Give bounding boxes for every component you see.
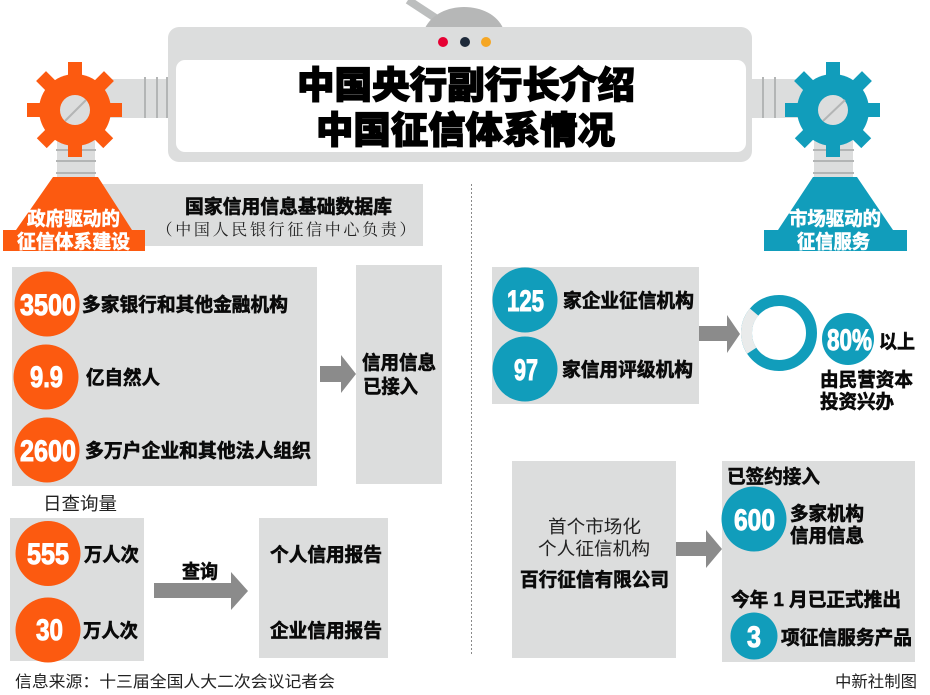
stat: 3500: 多家银行和其他金融机构 — [82, 293, 288, 316]
stat: 80 percent: 80% — [827, 324, 872, 357]
panel: Baihang credit: 百行征信有限公司 — [520, 569, 669, 591]
panel: national credit database — [100, 184, 423, 246]
donut chart: 80 percent — [746, 300, 812, 366]
stat: 555: 万人次 — [84, 544, 139, 566]
stat: 555: 555 — [27, 538, 69, 571]
stat: 30: 万人次 — [83, 620, 138, 642]
stat: 3500 — [14, 272, 288, 336]
stat: 2600: 多万户企业和其他法人组织 — [85, 439, 311, 462]
title panel — [168, 27, 752, 162]
stat: 97: 家信用评级机构 — [562, 358, 693, 381]
panel: Baihang results: 今年 1 月已正式推出 — [731, 588, 901, 611]
panel: Baihang credit: 首个市场化 — [548, 517, 641, 537]
panel: market agencies — [492, 267, 699, 404]
heading: daily queries: 日查询量 — [43, 494, 117, 514]
panel: Baihang results — [722, 461, 915, 662]
arrow: to Baihang results — [676, 530, 722, 568]
stat: 600: 多家机构 — [790, 502, 864, 525]
panel: credit reports: 个人信用报告 — [270, 544, 382, 566]
panel: credit reports — [259, 518, 388, 658]
title: 中国征信体系情况 — [316, 110, 615, 151]
panel: national credit database: （中国人民银行征信中心负责） — [156, 221, 416, 239]
panel: credit information connected — [356, 265, 442, 484]
left horizontal pipe — [105, 77, 169, 118]
stat: 97 — [492, 336, 693, 402]
title: 中国央行副行长介绍 — [297, 65, 635, 106]
orange flask label: 政府驱动的 — [27, 207, 120, 230]
title — [297, 65, 635, 151]
stat: 600: 信用信息 — [790, 524, 864, 547]
right vertical pipe — [813, 140, 854, 178]
panel: Baihang results: 已签约接入 — [727, 466, 820, 488]
top handle knob — [408, 0, 503, 28]
credit: 中新社制图 — [835, 673, 917, 691]
stat: 3500: 3500 — [20, 289, 76, 322]
stat: 3 — [730, 612, 912, 660]
panel: Baihang credit — [512, 461, 676, 658]
stat: 555 — [16, 521, 139, 586]
panel: credit information connected: 信用信息 — [362, 351, 436, 374]
icon: teal gear — [785, 62, 880, 157]
teal flask label: 市场驱动的 — [789, 207, 881, 230]
panel: daily query volume — [10, 518, 144, 662]
panel: credit reports: 企业信用报告 — [270, 619, 382, 642]
stat: 3: 3 — [747, 621, 761, 654]
stat: 80 percent: 投资兴办 — [820, 391, 894, 413]
stat: 9.9: 9.9 — [30, 361, 63, 394]
stat: 80 percent: 以上 — [879, 331, 915, 353]
teal flask label: 征信服务 — [797, 231, 870, 253]
panel: national credit database: 国家信用信息基础数据库 — [185, 195, 392, 218]
source note: 信息来源：十三届全国人大二次会议记者会 — [15, 673, 335, 691]
stat: 80 percent: 由民营资本 — [820, 369, 913, 391]
teal flask label — [764, 177, 907, 253]
orange flask label — [3, 177, 145, 253]
arrow: to credit info — [320, 355, 356, 393]
icon: orange gear — [27, 62, 122, 157]
left vertical pipe — [56, 140, 96, 178]
stat: 2600: 2600 — [20, 435, 76, 468]
arrow: query: 查询 — [182, 561, 218, 583]
stat: 600 — [722, 486, 864, 552]
panel: connected institutions — [12, 267, 317, 486]
stat: 9.9: 亿自然人 — [86, 366, 160, 389]
stat: 9.9 — [14, 344, 160, 410]
orange flask label: 征信体系建设 — [17, 231, 130, 253]
stat: 125 — [492, 268, 694, 332]
stat: 30: 30 — [36, 614, 63, 647]
stat: 30 — [16, 598, 138, 662]
stat: 600: 600 — [734, 504, 775, 537]
stat: 80 percent — [820, 313, 915, 413]
right horizontal pipe — [751, 77, 811, 118]
stat: 125: 家企业征信机构 — [563, 289, 694, 312]
arrow: query — [154, 561, 248, 610]
panel: Baihang credit: 个人征信机构 — [538, 539, 650, 559]
stat: 2600 — [14, 418, 311, 482]
panel: credit information connected: 已接入 — [363, 376, 418, 398]
stat: 3: 项征信服务产品 — [781, 627, 912, 649]
stat: 125: 125 — [507, 285, 544, 318]
stat: 97: 97 — [514, 354, 538, 387]
arrow: to share — [699, 315, 740, 353]
